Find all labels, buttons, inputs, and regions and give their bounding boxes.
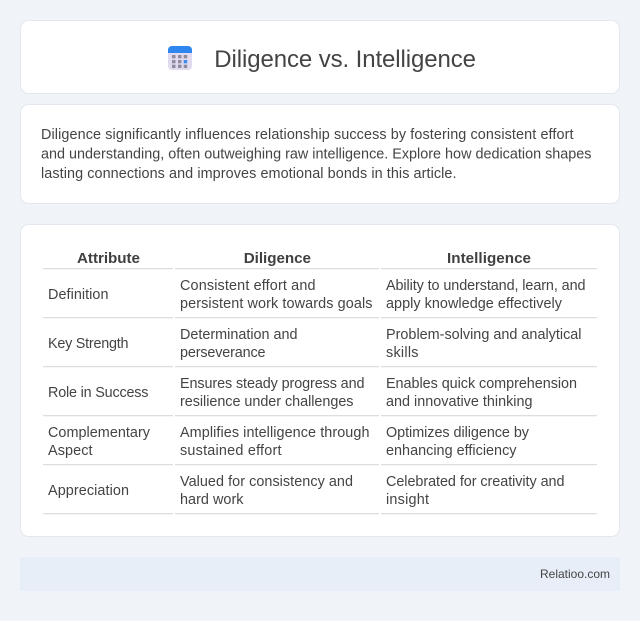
row: Appreciation: hard work	[180, 492, 244, 508]
footer bar	[20, 557, 620, 591]
intro paragraph: and understanding, often outweighing raw intelligence. Explore how dedication shapes	[41, 146, 592, 162]
row: Definition: Consistent effort and	[180, 278, 316, 294]
row: Definition: Definition	[48, 287, 108, 303]
intro paragraph: lasting connections and improves emotional bonds in this article.	[41, 166, 456, 182]
panel: comparison table	[20, 224, 620, 536]
row: Appreciation: Celebrated for creativity and	[386, 474, 564, 490]
row: Key Strength: Determination and	[180, 327, 298, 343]
row: Appreciation: Appreciation	[48, 483, 129, 499]
row: Key Strength: perseverance	[180, 345, 266, 361]
row: Key Strength: Key Strength	[48, 336, 128, 352]
row: Key Strength	[43, 327, 597, 367]
table header: Diligence	[244, 250, 311, 267]
title: Diligence vs. Intelligence	[214, 46, 476, 73]
row: Complementary Aspect	[43, 425, 597, 465]
footer credit: Relatioo.com	[540, 567, 610, 581]
row: Key Strength: Problem-solving and analytical	[386, 327, 582, 343]
row: Complementary Aspect: enhancing efficiency	[386, 443, 517, 459]
row: Role in Success	[43, 376, 597, 416]
table header: Intelligence	[447, 250, 531, 267]
table header: Attribute	[77, 250, 140, 267]
row: Appreciation: insight	[386, 492, 429, 508]
row: Role in Success: Ensures steady progress and	[180, 376, 364, 392]
row: Role in Success: resilience under challenges	[180, 394, 354, 410]
row: Complementary Aspect: Complementary	[48, 425, 151, 441]
row: Complementary Aspect: sustained effort	[180, 443, 282, 459]
row: Definition: persistent work towards goals	[180, 296, 372, 312]
intro paragraph	[41, 127, 592, 182]
panel: intro text	[20, 104, 620, 204]
row: Definition	[43, 278, 597, 318]
row: Role in Success: Enables quick comprehension	[386, 376, 577, 392]
row: Key Strength: skills	[386, 345, 418, 361]
row: Complementary Aspect: Amplifies intelligence through	[180, 425, 370, 441]
row: Appreciation	[43, 474, 597, 514]
row: Appreciation: Valued for consistency and	[180, 474, 353, 490]
row: Role in Success: Role in Success	[48, 385, 148, 401]
table header	[43, 250, 597, 269]
row: Definition: Ability to understand, learn, and	[386, 278, 586, 294]
row: Role in Success: and innovative thinking	[386, 394, 532, 410]
row: Definition: apply knowledge effectively	[386, 296, 563, 312]
row: Complementary Aspect: Aspect	[48, 443, 92, 459]
panel: title card	[20, 20, 620, 94]
row: Complementary Aspect: Optimizes diligence by	[386, 425, 530, 441]
icon: calendar	[168, 46, 192, 70]
intro paragraph: Diligence significantly influences relationship success by fostering consistent effort	[41, 127, 574, 143]
